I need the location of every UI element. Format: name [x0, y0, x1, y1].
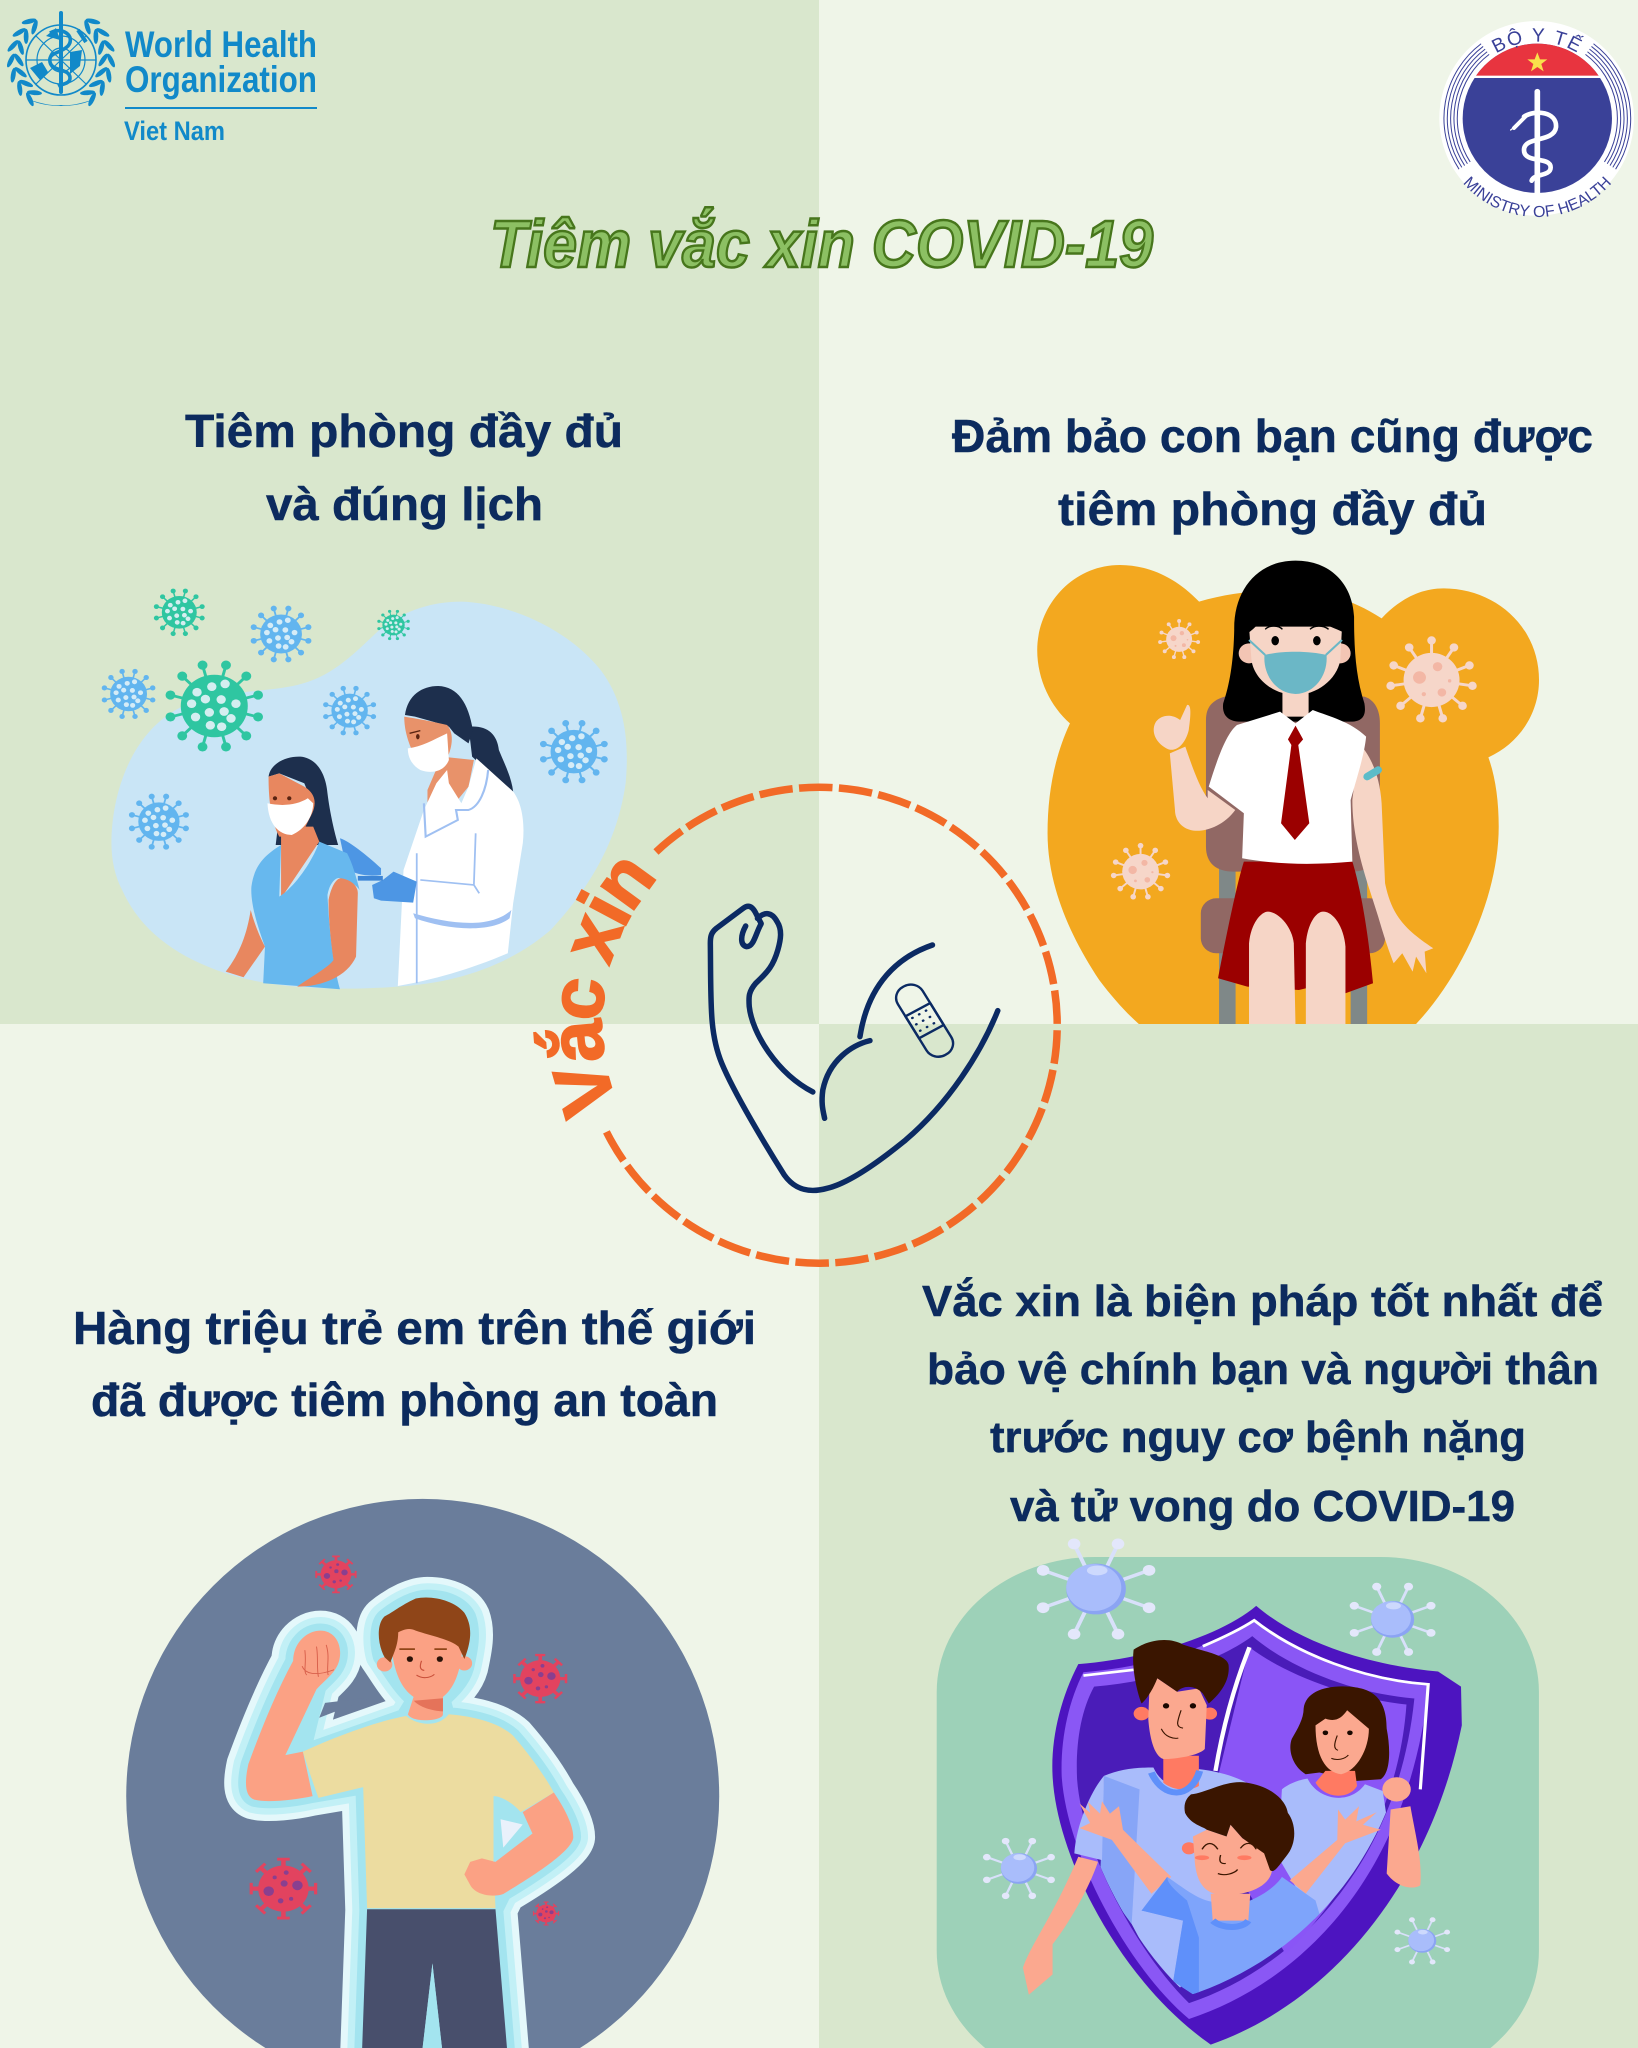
chair: [1201, 697, 1385, 1027]
illustration: schoolgirl vaccinated: [1037, 561, 1539, 1027]
title: Tiêm vắc xin COVID-19: [490, 207, 1153, 282]
circular label: Vắc xin: Vắc xin: [533, 860, 656, 1122]
illustration: family inside shield: [937, 1539, 1539, 2048]
illustration: nurse vaccinating patient: [102, 589, 627, 989]
logo: World Health Organization Viet Nam: Organization: [125, 59, 317, 100]
illustration: man with protective aura: [126, 1499, 719, 2048]
heading: Đảm bảo con bạn: Đảm bảo con bạn cũng được: [952, 410, 1593, 462]
heading: Hàng triệu trẻ em: Hàng triệu trẻ em trên thế giới: [73, 1302, 756, 1354]
heading: Đảm bảo con bạn: tiêm phòng đầy đủ: [1058, 483, 1487, 535]
logo text bottom: MINISTRY OF HEALTH: [1464, 176, 1611, 218]
heading: Vắc xin là biện pháp tốt nhất: Vắc xin là biện pháp tốt nhất để: [922, 1276, 1603, 1326]
icon: staff and snake: [1511, 92, 1556, 193]
viruses: [1111, 619, 1477, 900]
heading: Tiêm phòng đầy đủ: [185, 405, 623, 530]
viruses: [983, 1539, 1450, 1965]
heading: Hàng triệu trẻ em: đã được tiêm phòng an toàn: [91, 1374, 718, 1426]
circle: [126, 1499, 719, 2048]
heading: Hàng triệu trẻ em: [73, 1302, 756, 1426]
logo: Ministry of Health: [1440, 21, 1634, 218]
girl: [1154, 561, 1433, 1027]
heading: Vắc xin là biện pháp tốt nhất: [922, 1276, 1603, 1531]
logo: World Health Organization Viet Nam: Viet Nam: [124, 116, 225, 146]
icon: WHO emblem: [5, 12, 117, 108]
logo: World Health Organization Viet Nam: [5, 12, 317, 146]
nurse: [340, 686, 523, 986]
heading: Vắc xin là biện pháp tốt nhất: và tử vong do COVID-19: [1010, 1482, 1515, 1531]
orange blob: [1037, 565, 1539, 1024]
icon: bandage: [891, 980, 958, 1061]
logo text top: BỘ Y TẾ: [1491, 28, 1584, 53]
heading: Đảm bảo con bạn: [952, 410, 1593, 535]
blob: [111, 602, 627, 989]
central dashed circle: [606, 787, 1057, 1263]
wordmark: World Health: [125, 24, 317, 65]
man: [246, 1597, 573, 2048]
aura: [246, 1597, 573, 2048]
icon: flexed arm with bandage: [710, 906, 998, 1190]
heading: Tiêm phòng đầy đủ: Tiêm phòng đầy đủ: [185, 405, 623, 457]
shield: [1052, 1606, 1462, 2045]
patient: [226, 757, 360, 989]
viruses: [251, 1556, 566, 1925]
green rounded panel: [937, 1557, 1539, 2048]
viruses: [102, 589, 608, 850]
heading: Vắc xin là biện pháp tốt nhất: trước nguy cơ bệnh nặng: [990, 1413, 1526, 1462]
family: [1023, 1640, 1421, 1998]
icon: star: [1527, 52, 1547, 71]
heading: Vắc xin là biện pháp tốt nhất: bảo vệ chính bạn và người thân: [927, 1345, 1599, 1394]
heading: Tiêm phòng đầy đủ: và đúng lịch: [266, 478, 543, 530]
